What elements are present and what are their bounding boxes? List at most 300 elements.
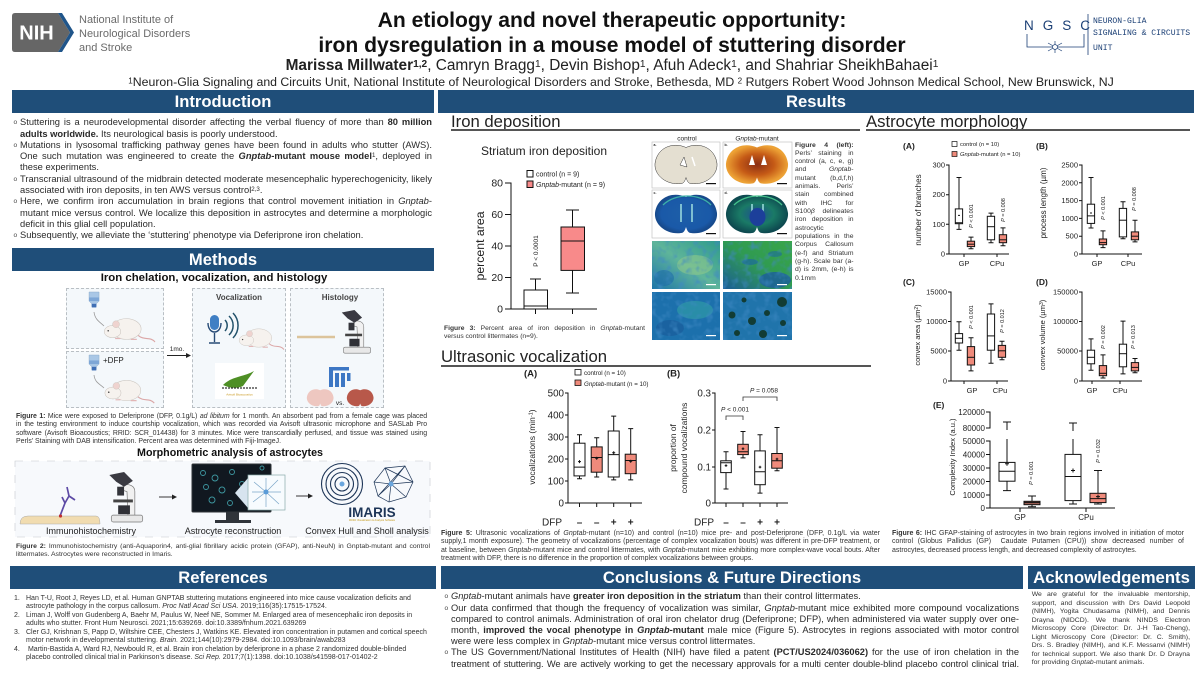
caption: figure 4: with IHC for	[795, 200, 854, 207]
caption: figure 6: astrocytes, decreased process length, and decreased complexity of astrocytes.	[892, 547, 1137, 554]
heading: Methods: Methods	[189, 250, 257, 269]
figure: histology micrographs: b.	[724, 143, 728, 147]
icon: Sholl concentric circles	[322, 464, 362, 504]
chart: process length (B): 1500	[1061, 196, 1078, 205]
bracket: P = 0.058: P = 0.058	[750, 388, 778, 394]
label: Astrocyte reconstruction	[185, 526, 281, 536]
chart: convex volume (D): (D)	[1036, 277, 1048, 287]
box	[1090, 470, 1106, 504]
legend	[952, 142, 1020, 158]
chart: number of branches (A): (A)	[903, 141, 915, 151]
text: conclusions	[444, 591, 1019, 669]
micrograph e	[652, 241, 720, 289]
chart: vocalizations (A)	[524, 368, 648, 528]
chart: complexity index (E): 30000	[963, 464, 986, 473]
diagram: iron chelation workflow	[66, 288, 384, 408]
chart: complexity index (E): 10000	[963, 491, 986, 500]
chart: convex volume (D): )	[1038, 299, 1047, 302]
legend: Gnptab-mutant (n = 10)	[960, 152, 1020, 158]
chart: number of branches (A): 300	[932, 160, 945, 170]
text: references	[14, 594, 427, 661]
row: DFP: –	[594, 518, 600, 528]
box: mutant	[561, 210, 584, 293]
box	[574, 435, 585, 479]
chart: compound vocalizations (B): proportion of	[668, 424, 678, 472]
box	[955, 178, 963, 229]
subheading: morphometric analysis: Morphometric analysis of astrocytes	[137, 447, 323, 459]
icon: antibody on slide	[20, 487, 100, 524]
text: conclusions: month, improved the vocal phenotype in Gnptab-mutant male mice (Figure 5). Astrocytes in regions associated with motor control	[451, 625, 1019, 635]
arrow	[159, 494, 177, 500]
caption: figure 2: Figure 2: Immunohistochemistry (anti-Aquaporin4, anti-glial fibrillary acidic protein (GFAP), anti-NeuN) in Gnptab-mutant and control	[16, 543, 430, 550]
text: o	[444, 593, 448, 600]
chart: striatum iron deposition: 60	[491, 209, 503, 221]
axes	[1079, 292, 1142, 384]
chart: number of branches (A): P < 0.001	[969, 204, 975, 228]
chart: compound vocalizations (B): 0.1	[697, 462, 711, 474]
text: conclusions: compared to control animals. Administration of oral iron chelator drug (Deferiprone; DFP), when administered via water supply over one-	[451, 614, 1019, 624]
caption: figure 6: Figure 6: IHC GFAP-staining of astrocytes in two brain regions involved in initiation of motor	[892, 530, 1184, 537]
chart: convex area (C)	[903, 277, 1008, 395]
chart: process length (B): (B)	[1036, 141, 1048, 151]
chart: convex area (C): P < 0.001	[969, 305, 975, 329]
caption: figure 4: and Gnptab-	[795, 166, 854, 173]
chart: complexity index (E): P = 0.001	[1029, 461, 1035, 485]
logo: Neuron-Glia Signaling and Circuits Unit: NEURON-GLIA	[1093, 17, 1147, 26]
chart: striatum iron deposition	[473, 144, 607, 316]
logo: NIH NINDS: National Institute of	[79, 14, 173, 26]
chart: striatum iron deposition: 20	[491, 272, 503, 284]
chart: process length (B): P < 0.001	[1101, 196, 1107, 220]
heading: Acknowledgements: Acknowledgements	[1033, 568, 1190, 587]
caption: figure 4: (g-h). Scale bar (a-	[795, 258, 854, 265]
text: acknowledgements: support, and discussion with Drs David Leopold	[1032, 600, 1190, 606]
box	[967, 338, 975, 371]
micrograph a	[652, 142, 720, 188]
heading: Results: Results	[786, 92, 846, 111]
bracket: P = 0.058	[743, 388, 778, 401]
heading: Introduction: Introduction	[175, 92, 271, 111]
caption: figure 2: littermates. Astrocytes were reconstructed in Imaris.	[16, 551, 173, 558]
text: introduction bullets: One such mutation was engineered to create the Gnptab-mutant mouse model1, deployed in	[20, 151, 432, 161]
box	[755, 435, 765, 493]
text: introduction bullets: Here, we confirm iron accumulation in brain regions that control movement initiation in Gnptab-	[20, 196, 432, 206]
illustrations	[88, 292, 374, 407]
chart: vocalizations (A): 100	[548, 476, 565, 488]
axes	[712, 393, 788, 507]
label: Histology: Histology	[322, 293, 359, 302]
caption: figure 4: d) is 2mm, (e-h) is	[795, 266, 854, 273]
text: conclusions: treatment of stuttering. We are actively working to get the necessary approvals for a multi center double-blind placebo control clinical trial.	[451, 659, 1019, 669]
chart: vocalizations (A): -1	[528, 412, 534, 417]
affiliations: 1Neuron-Glia Signaling and Circuits Unit, National Institute of Neurological Disorders and Stroke, Bethesda, MD 2 Rutgers Robert Wood Johnson Medical School, New Brunswick, NJ	[128, 74, 1114, 88]
text: conclusions: The US Government/National Institutes of Health (NIH) have filed a patent (PCT/US2024/036062) for the use of iron chelation in the	[451, 647, 1019, 657]
caption: figure 4: (e-f) and Striatum	[795, 250, 854, 257]
chart: convex volume (D): 150000	[1053, 288, 1078, 296]
box	[955, 322, 963, 350]
caption: figure 6: control (Globus Pallidus (GP) Caudate Putamen (CPU)) show decreased number of	[892, 538, 1184, 545]
chart: vocalizations (A): 400	[548, 410, 565, 422]
text: introduction bullets: mutant mice versus control. We localize this deposition in astrocytes and determine a morphologic	[20, 208, 432, 218]
text: references: Martin-Bastida A, Ward RJ, Newbould R, et al. Brain iron chelation by deferiprone in a phase 2 randomized double-blinded	[28, 646, 406, 653]
text: acknowledgements: (NIMH), Yogita Chudasama (NIMH), and Dennis	[1032, 608, 1190, 615]
chart: convex area (C): GP	[967, 386, 977, 395]
text: introduction bullets: these experiments.	[20, 162, 99, 172]
logo: Neuron-Glia Signaling and Circuits Unit	[1024, 14, 1190, 55]
chart: compound vocalizations (B): 0.3	[697, 388, 712, 400]
icon: DFP water bottle with mouse: +DFP	[103, 356, 124, 365]
chart: number of branches (A): GP	[959, 259, 969, 268]
legend	[575, 370, 648, 388]
text: 1.	[14, 595, 20, 602]
chart: compound vocalizations (B)	[667, 368, 788, 528]
box	[1065, 423, 1081, 504]
chart: convex area (C): 2	[914, 307, 920, 310]
chart: complexity index (E): 120000	[958, 408, 986, 417]
row: DFP	[694, 518, 780, 528]
chart: striatum iron deposition: percent area	[473, 211, 487, 281]
caption: figure 4: S100β delineates	[795, 208, 854, 215]
text: o	[14, 119, 17, 126]
row: DFP: +	[774, 518, 780, 528]
caption: figure 4: Perls’ staining in	[795, 150, 854, 157]
chart: compound vocalizations (B): 0.2	[697, 426, 711, 436]
caption: figure 5: at baseline, between Gnptab-mutant mice and control littermates, with Gnptab-mutant mice exhibiting more complex-wave vocal bouts. After	[441, 547, 880, 554]
heading: ultrasonic vocalization: Ultrasonic vocalization	[441, 347, 607, 366]
box	[1024, 496, 1040, 507]
rule	[866, 129, 1190, 131]
row: DFP: DFP	[542, 518, 562, 528]
box	[967, 237, 975, 249]
text: o	[14, 198, 17, 205]
chart: striatum iron deposition: 80	[491, 178, 503, 190]
row: DFP: +	[757, 518, 763, 528]
label: Vocalization: Vocalization	[216, 293, 262, 302]
chart: convex volume (D): CPu	[1113, 386, 1127, 395]
caption: figure 3	[444, 325, 645, 340]
box	[998, 341, 1006, 360]
chart: convex volume (D): 3	[1039, 302, 1045, 305]
logo: NIH NINDS: and Stroke	[79, 42, 132, 54]
chart: process length (B): 2000	[1061, 178, 1078, 187]
micrograph h	[723, 292, 792, 340]
text: o	[444, 605, 448, 612]
icon: microscope	[109, 472, 143, 522]
caption: figure 4: iron deposition in	[795, 216, 854, 223]
caption: figure 1: Figure 1: Mice were exposed to Deferiprone (DFP, 0.1g/L) ad libitum for 1 month. An absorbent pad from a female cage was placed	[16, 413, 427, 420]
chart: vocalizations (A): 200	[548, 454, 565, 466]
caption: figure 4: astrocytic	[795, 225, 824, 232]
row: DFP: –	[577, 518, 583, 528]
caption: figure 4: control (a, c, e, g)	[795, 158, 854, 165]
chart: number of branches (A): 200	[932, 190, 945, 199]
chart: convex volume (D): 0	[1074, 376, 1078, 386]
caption: figure 5: Figure 5: Ultrasonic vocalizations of Gnptab-mutant (n=10) and control (n=10) mice pre- and post-Deferiprone (DFP, 0.1g/L via water	[441, 530, 880, 537]
caption: figure 4: mutant (b,d,f,h)	[795, 175, 854, 182]
chart: process length (B): GP	[1092, 259, 1102, 268]
axes	[505, 183, 597, 314]
chart: convex area (C): 5000	[930, 346, 947, 356]
text: o	[444, 649, 448, 656]
micrograph d	[723, 190, 792, 238]
chart: number of branches (A): 100	[932, 220, 945, 229]
text: introduction bullets	[14, 117, 432, 240]
heading: Methods	[12, 248, 434, 271]
legend: control (n = 10)	[584, 370, 626, 377]
icon: brains versus	[307, 389, 374, 407]
text: introduction bullets: adults worldwide. Its neurological basis is poorly understood.	[20, 129, 278, 139]
text: conclusions: Gnptab-mutant animals have greater iron deposition in the striatum than their control littermates.	[451, 591, 861, 601]
text: references: Han T-U, Root J, Reyes LD, et al. Human GNPTAB stuttering mutations engineered into mice cause vocalization deficits and	[26, 595, 411, 602]
logo: IMARIS: 3D/4D Visualization & Analysis Software	[349, 518, 396, 522]
box	[987, 304, 995, 363]
chart: complexity index (E): Complexity Index (a.u.)	[948, 418, 957, 496]
text: references: astrocyte pathology in the corpus callosum. Proc Natl Acad Sci USA. 2019;116(35):17515-17524.	[26, 603, 327, 610]
chart: convex area (C): convex area (µm	[913, 310, 922, 366]
micrograph g	[652, 292, 720, 340]
diagram: morphometric workflow	[14, 460, 430, 538]
logo: Avisoft Bioacoustics: Avisoft Bioacoustics	[226, 392, 253, 396]
chart: striatum iron deposition: 0	[497, 304, 503, 316]
chart: vocalizations (A): 0	[559, 498, 565, 510]
rule	[441, 364, 871, 366]
chart: convex area (C): 10000	[926, 317, 947, 326]
row: DFP: +	[611, 518, 617, 528]
caption: figure 1: software (Avisoft Bioacoustics; RRID: SCR_014438) for 3 minutes. Mice were transcardially perfused, and tissue was stained using	[16, 430, 427, 437]
caption: figure 4: 0.1mm	[795, 275, 816, 282]
legend: Gnptab-mutant (n = 9)	[536, 182, 605, 189]
caption: figure 3: versus control littermates (n=9).	[444, 333, 538, 340]
chart: number of branches (A): P = 0.008	[1001, 198, 1007, 222]
panel: vocalization	[192, 288, 286, 408]
caption: figure 4: populations in the	[795, 233, 854, 240]
row: DFP: DFP	[694, 518, 714, 528]
subheading: iron chelation: Iron chelation, vocalization, and histology	[101, 272, 327, 284]
arrow: one month	[167, 346, 191, 358]
micrograph b	[723, 142, 792, 188]
chart: process length (B): P = 0.008	[1132, 187, 1138, 211]
box	[999, 422, 1015, 491]
chart: convex volume (D): P = 0.013	[1131, 325, 1137, 349]
caption: figure 5	[441, 530, 880, 562]
box	[1119, 321, 1127, 374]
caption: figure 4: animals. Perls’	[795, 183, 854, 190]
text: acknowledgements: Drayna (NIDCD). We thank NINDS Electron	[1032, 616, 1190, 624]
figure: histology micrographs: a.	[654, 143, 656, 147]
axes	[986, 412, 1115, 512]
caption: figure 4	[795, 142, 854, 282]
chart: process length (B): 2500	[1061, 160, 1078, 170]
chart: convex area (C): 15000	[926, 288, 947, 296]
chart: convex area (C): CPu	[993, 386, 1007, 395]
heading: References	[10, 566, 436, 589]
figure: histology micrographs: c.	[654, 191, 656, 195]
chart: vocalizations (A): )	[527, 409, 537, 412]
chart: complexity index (E)	[933, 400, 1115, 522]
arrow: one month: 1mo.	[170, 346, 184, 353]
caption: figure 1	[16, 412, 427, 445]
figure: histology micrographs: d.	[724, 191, 728, 195]
box	[1087, 178, 1095, 228]
icon: brains versus: vs.	[336, 400, 344, 407]
text: o	[14, 176, 17, 183]
chart: process length (B): 0	[1074, 250, 1078, 258]
panel: histology	[290, 288, 384, 408]
box	[772, 428, 782, 471]
box	[1131, 358, 1139, 373]
text: 4.	[14, 646, 20, 652]
box	[1119, 202, 1127, 239]
box	[987, 213, 995, 243]
text: conclusions: were were less complex in Gnptab-mutant mice versus control littermates.	[451, 636, 755, 646]
caption: figure 2	[16, 543, 430, 558]
chart: convex area (C): )	[913, 304, 922, 307]
micrograph c	[652, 190, 720, 238]
chart: convex volume (D): 50000	[1057, 346, 1078, 356]
box	[1099, 231, 1107, 248]
logo: Avisoft Bioacoustics	[215, 363, 264, 399]
axes	[946, 165, 1009, 257]
text: introduction bullets: Subsequently, we alleviate the ‘stuttering’ phenotype via Deferiprone iron chelation.	[20, 230, 363, 240]
heading: Conclusions	[441, 566, 1023, 589]
legend: Gnptab-mutant (n = 10)	[584, 381, 648, 388]
title	[318, 9, 906, 56]
heading: iron deposition: Iron deposition	[451, 112, 560, 131]
chart: complexity index (E): 0	[981, 504, 986, 513]
row: DFP: +	[628, 518, 634, 528]
icon: convex hull	[374, 466, 413, 502]
chart: convex volume (D): 100000	[1053, 317, 1078, 326]
box	[999, 228, 1007, 246]
text: references: adults who stutter. Front Hum Neurosci. 2021;15:639269. doi:10.3389/fnhum.2021.639269	[26, 620, 306, 627]
chart: number of branches (A): CPu	[990, 259, 1004, 268]
row: DFP: –	[740, 518, 746, 528]
logo: Neuron-Glia Signaling and Circuits Unit: NGSC	[1024, 18, 1099, 33]
text: acknowledgements: We are grateful for the invaluable mentorship,	[1032, 591, 1190, 598]
chart: vocalizations (A): (A)	[524, 368, 537, 380]
text: introduction bullets: Stuttering is a neurodevelopmental disorder affecting the verbal fluency of more than 80 million	[20, 117, 432, 127]
chart: number of branches (A): 0	[941, 250, 945, 258]
chart: convex volume (D)	[1036, 277, 1142, 395]
chart: number of branches (A): number of branches	[914, 174, 923, 246]
chart: complexity index (E): (E)	[933, 400, 944, 410]
text: references: Cler GJ, Krishnan S, Papp D, Wiltshire CEE, Chesters J, Watkins KE. Elevated iron concentration in putamen and cortical speech	[26, 629, 427, 636]
text: acknowledgements: for providing Gnptab-mutant animals.	[1032, 659, 1144, 666]
chart: complexity index (E): P = 0.032	[1096, 439, 1102, 463]
chart: complexity index (E): GP	[1014, 513, 1026, 522]
chart: convex volume (D): P = 0.002	[1101, 325, 1107, 349]
icon: DFP water bottle with mouse	[89, 355, 154, 403]
box	[721, 452, 731, 489]
text: acknowledgements: Microscopy Core (Director: Dr. J-H Tao-Cheng),	[1032, 625, 1190, 632]
text: o	[14, 142, 17, 149]
icon: water bottle with mouse	[89, 292, 155, 342]
rule	[451, 129, 860, 131]
box	[608, 416, 619, 480]
chart: complexity index (E): 40000	[963, 450, 986, 460]
axes	[948, 292, 1008, 384]
icon: slide and microscope	[297, 310, 371, 353]
chart: convex area (C): (C)	[903, 277, 915, 287]
label: Immunohistochemistry	[46, 526, 137, 536]
caption: figure 4: Figure 4 (left):	[795, 142, 854, 148]
heading: Results	[438, 90, 1194, 113]
row: DFP	[542, 518, 634, 528]
axes	[565, 393, 642, 507]
icon: microphone and mouse	[208, 313, 284, 350]
chart: vocalizations (A): vocalizations (min	[527, 417, 537, 485]
chart: striatum iron deposition: 40	[491, 240, 503, 252]
text: introduction bullets: Mutations in lysosomal trafficking pathway genes have been found in adults who stutter (AWS).	[20, 140, 432, 150]
row: DFP: –	[723, 518, 729, 528]
chart: convex area (C): 0	[943, 376, 947, 386]
title: iron dysregulation in a mouse model of stuttering disorder	[318, 34, 906, 56]
caption: figure 5: treatment with DFP, there is no difference in the proportion of complex vocalizations between groups.	[441, 555, 753, 562]
figure: histology micrographs	[652, 136, 792, 340]
chart: convex volume (D): convex volume (µm	[1038, 305, 1047, 370]
text: 2.	[14, 612, 20, 619]
chart: vocalizations (A): 500	[548, 388, 565, 400]
legend: control (n = 9)	[536, 172, 579, 178]
chart: complexity index (E): 20000	[963, 478, 986, 486]
text: introduction bullets: Transcranial ultrasound of the midbrain detected moderate mesencephalic hyperechogenicity, likely	[20, 174, 432, 184]
text: introduction bullets: deficit in this glial cell population.	[20, 219, 156, 229]
panel: DFP water	[66, 351, 164, 408]
chart: complexity index (E): CPu	[1078, 513, 1094, 522]
chart: process length (B): process length (µm)	[1039, 167, 1048, 238]
chart: vocalizations (A): 300	[548, 432, 565, 444]
heading: Introduction	[12, 90, 434, 113]
chart: striatum iron deposition: P < 0.0001	[533, 235, 540, 267]
chart: striatum iron deposition: Striatum iron deposition	[481, 144, 607, 158]
text: acknowledgements: Drs. S. Bradley (NIMH), and K.F. Messanvi (NIMH)	[1032, 642, 1190, 649]
logo: NIH NINDS: NIH	[19, 22, 54, 44]
chart: compound vocalizations (B): (B)	[667, 368, 680, 380]
box	[591, 438, 602, 477]
logo: Fiji	[329, 367, 350, 387]
figure: histology micrographs: Gnptab-mutant	[735, 136, 779, 142]
chart: compound vocalizations (B): compound vocalizations	[679, 403, 689, 493]
chart: process length (B): 1000	[1061, 214, 1078, 223]
logo: Neuron-Glia Signaling and Circuits Unit: SIGNALING & CIRCUITS	[1093, 29, 1190, 38]
text: acknowledgements: Light Microscopy Core (Director: Dr. C. Smith),	[1032, 634, 1190, 640]
bracket: P < 0.001: P < 0.001	[721, 406, 749, 414]
text: 3.	[14, 628, 20, 636]
legend: control (n = 10)	[960, 142, 999, 148]
chart: complexity index (E): 80000	[963, 424, 986, 433]
chart: process length (B): CPu	[1121, 259, 1135, 268]
arrow	[296, 494, 313, 498]
chart: process length (B)	[1036, 141, 1142, 268]
text: acknowledgements: for technical support. We also thank Dr. D Drayna	[1032, 650, 1190, 658]
box	[625, 429, 636, 480]
legend	[527, 170, 605, 189]
chart: compound vocalizations (B): 0	[706, 498, 712, 510]
box	[738, 432, 748, 458]
figure: histology micrographs: control	[677, 136, 697, 142]
heading: Conclusions: Conclusions & Future Directions	[603, 568, 861, 587]
text: references: motor network in developmental stuttering. Brain. 2021;144(10):2979-2984. doi:10.1093/brain/awab283	[26, 637, 346, 644]
chart: convex volume (D): GP	[1087, 386, 1097, 395]
caption: figure 5: supply,1 month exposure). The geometry of vocalizations (percentage of complex vocalization bouts) was different in pre-DFP treatment, or	[441, 538, 880, 545]
panel: control water	[66, 288, 164, 349]
box	[1131, 220, 1139, 242]
caption: figure 3: Figure 3: Percent area of iron deposition in Gnptab-mutant	[444, 325, 645, 332]
box	[1087, 339, 1095, 370]
text: conclusions: Our data confirmed that though the frequency of vocalization was similar, Gnptab-mutant mice exhibited more compound vocalizations	[451, 603, 1019, 613]
box	[1099, 355, 1107, 378]
text: acknowledgements	[1032, 591, 1190, 666]
